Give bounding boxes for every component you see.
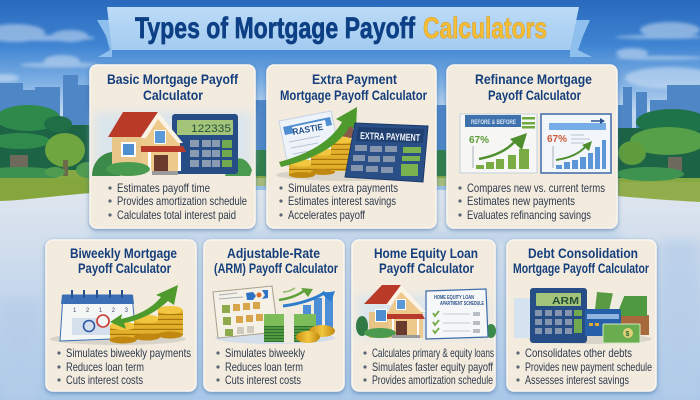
illustration: calculator, credit card and cash xyxy=(514,288,652,344)
illustration: checklist, money and chart xyxy=(213,286,335,344)
heading: Payoff Calculator xyxy=(379,260,474,276)
heading xyxy=(374,245,478,276)
title text: Types of Mortgage Payoff xyxy=(135,12,416,45)
title accent word: Calculators xyxy=(423,12,547,45)
bullet list xyxy=(458,181,605,222)
heading xyxy=(475,71,592,103)
bullet list: Calculates primary & equity loans xyxy=(372,346,494,360)
illustration: document, coins, arrow and calculator: EXTRA PAYMENT xyxy=(360,131,420,144)
heading: Basic Mortgage Payoff xyxy=(107,71,238,87)
bullet list: Estimates interest savings xyxy=(288,194,396,208)
heading: Extra Payment xyxy=(312,71,397,87)
trees right xyxy=(616,109,700,202)
bullet list xyxy=(108,181,247,222)
panel: basic mortgage payoff calculator xyxy=(90,65,255,228)
illustration: calendar, coins and arrow: 1 2 1 2 3 xyxy=(73,308,129,314)
bullet list: Provides amortization schedule xyxy=(372,373,493,387)
bullet list: Provides amortization schedule xyxy=(117,194,247,208)
heading: Biweekly Mortgage xyxy=(70,245,177,261)
heading xyxy=(107,71,238,103)
illustration: house and amortization schedule: APARTMENT SCHEDULE xyxy=(440,301,484,307)
bullet list: Reduces loan term xyxy=(225,360,303,374)
panel: home equity loan payoff calculator xyxy=(352,240,496,391)
heading: Payoff Calculator xyxy=(488,87,581,103)
bullet list: Evaluates refinancing savings xyxy=(467,208,591,222)
bullet list: Accelerates payoff xyxy=(288,208,366,222)
heading: Debt Consolidation xyxy=(528,245,638,261)
bullet list xyxy=(516,346,652,387)
heading xyxy=(214,245,338,276)
illustration: document, coins, arrow and calculator: RASTIE xyxy=(292,122,324,137)
bullet list xyxy=(57,346,191,387)
illustration: before and after charts xyxy=(460,114,611,173)
illustration: document, coins, arrow and calculator xyxy=(276,107,428,182)
bullet list: Estimates new payments xyxy=(467,194,575,208)
bullet list: Calculates total interest paid xyxy=(117,208,236,222)
heading: Refinance Mortgage xyxy=(475,71,592,87)
panel: debt consolidation mortgage payoff calculator xyxy=(507,240,656,391)
trees left xyxy=(0,105,100,201)
illustration: calculator, credit card and cash: $ xyxy=(626,331,630,338)
bullet list: Cuts interest costs xyxy=(225,373,301,387)
illustration: before and after charts: REFORE & BEFORE xyxy=(471,119,516,126)
heading: Mortgage Payoff Calculator xyxy=(280,87,427,103)
bullet list: Simulates faster equity payoff xyxy=(372,360,494,374)
heading: Calculator xyxy=(143,87,203,103)
heading: Adjustable-Rate xyxy=(227,245,320,261)
bullet list: Provides new payment schedule xyxy=(525,360,652,374)
illustration: calculator, credit card and cash: ARM xyxy=(552,296,579,307)
heading xyxy=(280,71,427,103)
illustration: house and amortization schedule: HOME EQUITY LOAN xyxy=(434,295,474,301)
bullet list xyxy=(363,346,494,387)
bullet list xyxy=(216,346,305,387)
bullet list: Reduces loan term xyxy=(66,360,144,374)
ground patches xyxy=(0,232,700,400)
heading: Payoff Calculator xyxy=(78,260,171,276)
illustration: house and calculator: 122335 xyxy=(191,123,231,135)
panel: adjustable-rate payoff calculator xyxy=(204,240,344,391)
heading xyxy=(70,245,177,276)
illustration: house and calculator xyxy=(92,112,252,176)
bullet list: Simulates biweekly xyxy=(225,346,305,360)
bullet list: Consolidates other debts xyxy=(525,346,632,360)
panel: extra payment mortgage payoff calculator xyxy=(267,65,436,228)
bullet list xyxy=(279,181,398,222)
bullet list: Cuts interest costs xyxy=(66,373,143,387)
bullet list: Simulates extra payments xyxy=(288,181,398,195)
heading: Home Equity Loan xyxy=(374,245,478,261)
title banner xyxy=(97,7,592,57)
bullet list: Assesses interest savings xyxy=(525,373,629,387)
heading xyxy=(513,245,649,276)
illustration: before and after charts: 67% xyxy=(547,134,567,145)
panel: biweekly mortgage payoff calculator xyxy=(46,240,196,391)
bullet list: Simulates biweekly payments xyxy=(66,346,191,360)
heading: Mortgage Payoff Calculator xyxy=(513,260,649,276)
heading: (ARM) Payoff Calculator xyxy=(214,260,338,276)
illustration: house and amortization schedule xyxy=(356,285,496,339)
illustration: calendar, coins and arrow xyxy=(50,285,186,345)
panel: refinance mortgage payoff calculator xyxy=(447,65,617,228)
illustration: before and after charts: 67% xyxy=(469,135,489,146)
bullet list: Compares new vs. current terms xyxy=(467,181,605,195)
bullet list: Estimates payoff time xyxy=(117,181,210,195)
